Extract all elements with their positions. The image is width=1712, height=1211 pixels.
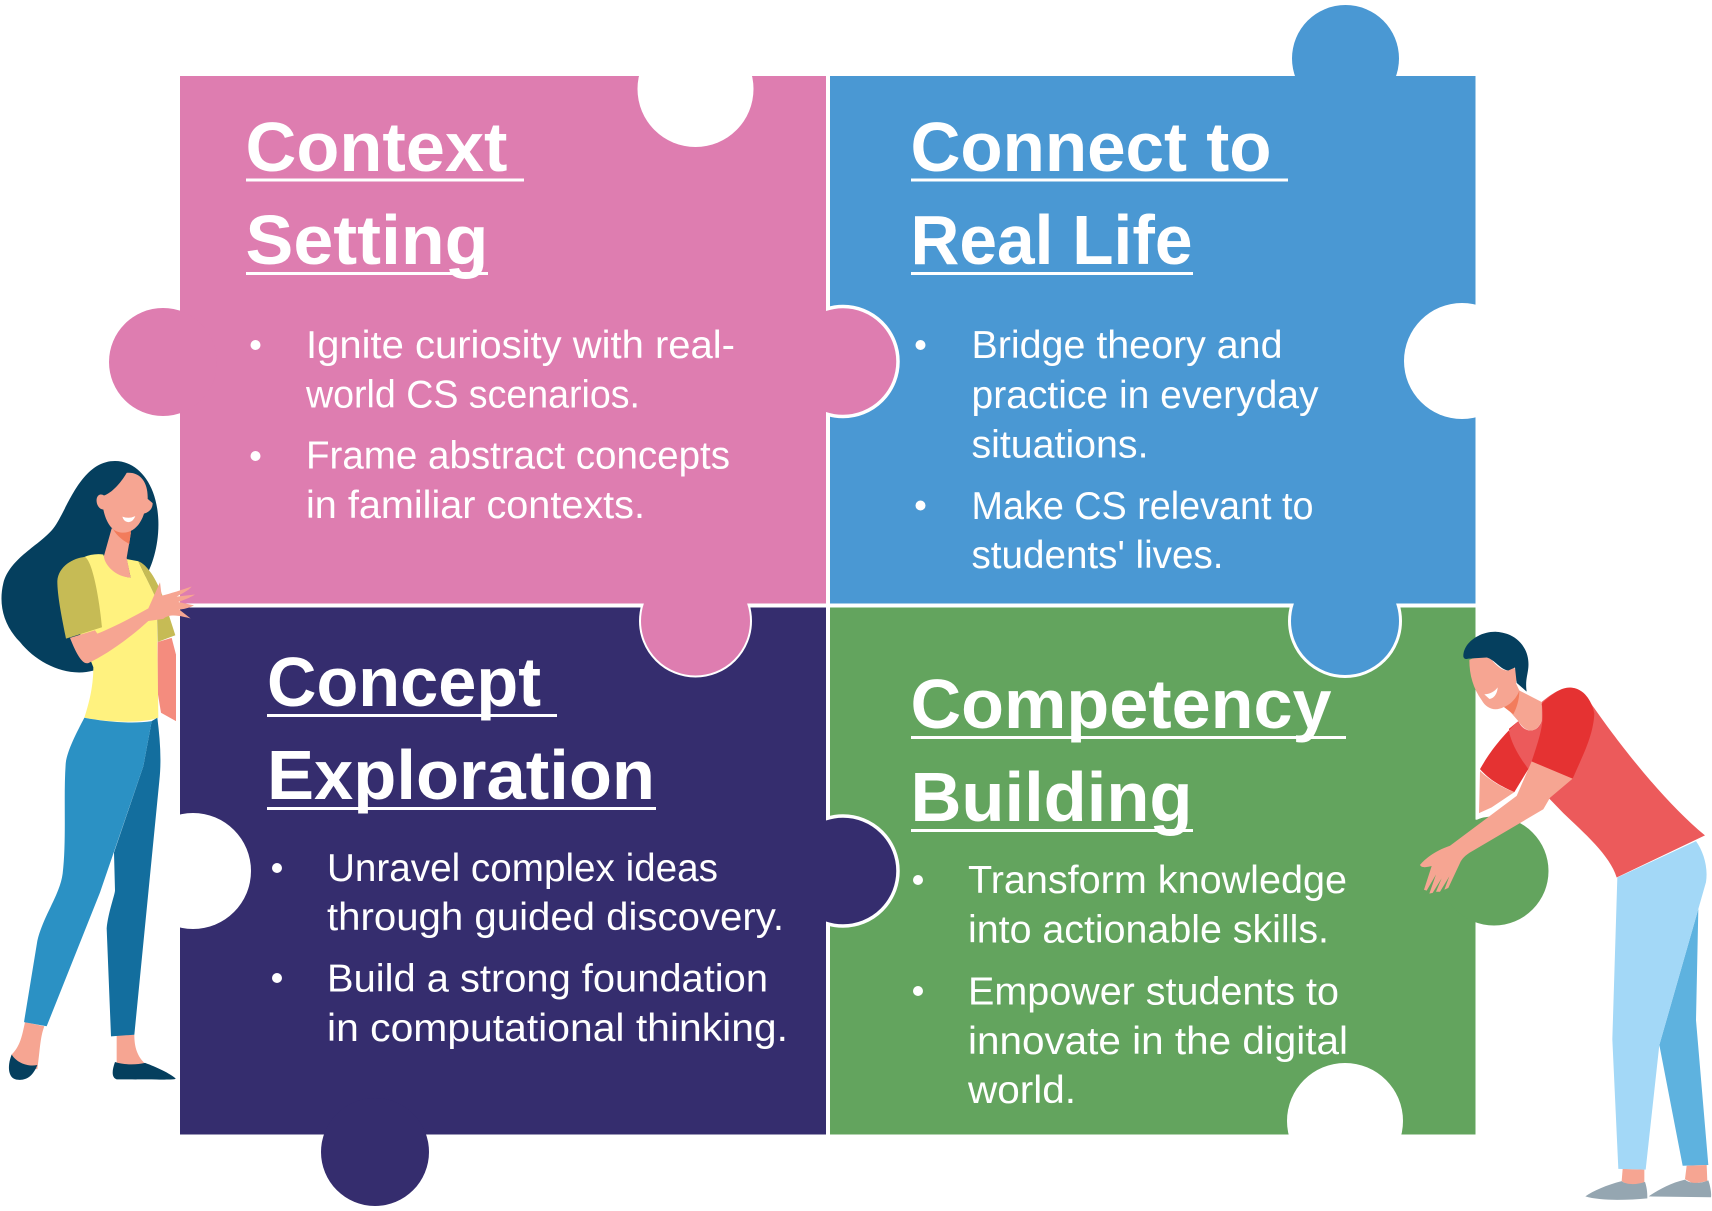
text: context setting bullets: in familiar contexts. (306, 484, 645, 527)
text: concept exploration bullets: Unravel complex ideas (327, 847, 718, 890)
heading: Competency Building: Building (910, 758, 1192, 836)
text: competency building bullets (913, 859, 1348, 1112)
panel: competency building (830, 608, 1548, 1179)
heading: Context Setting: Context (246, 108, 508, 186)
heading: Concept Exploration: Concept (267, 643, 541, 721)
panel: connect to real life (830, 5, 1520, 604)
heading: Connect to Real Life: Connect to (910, 108, 1272, 186)
illustration: man pushing puzzle (1420, 632, 1711, 1200)
heading: Competency Building: Competency (910, 665, 1332, 743)
heading: Concept Exploration (267, 643, 656, 814)
puzzle tab: pink into blue (826, 304, 900, 418)
text: concept exploration bullets: Build a strong foundation (327, 958, 768, 1000)
text: context setting bullets (250, 324, 735, 527)
heading: Concept Exploration: Exploration (267, 736, 655, 814)
text: competency building bullets: world. (967, 1069, 1076, 1112)
text: competency building bullets: Transform knowledge (968, 859, 1347, 902)
text: competency building bullets: innovate in the digital (968, 1020, 1348, 1063)
text: concept exploration bullets: in computational thinking. (327, 1007, 788, 1050)
text: connect to real life bullets: Bridge theory and (972, 324, 1282, 367)
puzzle tab: pink into navy (639, 604, 752, 678)
text: context setting bullets: Frame abstract concepts (306, 434, 730, 478)
text: concept exploration bullets: through guided discovery. (327, 896, 784, 939)
heading: Connect to Real Life (910, 108, 1288, 279)
heading: Context Setting: Setting (246, 201, 488, 279)
panel: concept exploration (135, 608, 826, 1206)
text: context setting bullets: world CS scenarios. (305, 374, 640, 416)
text: connect to real life bullets (916, 324, 1319, 577)
text: concept exploration bullets (272, 847, 788, 1050)
puzzle tab: navy into green (826, 814, 900, 928)
text: connect to real life bullets: situations. (972, 424, 1148, 466)
text: connect to real life bullets: practice in everyday (972, 374, 1319, 417)
text: connect to real life bullets: students' lives. (972, 534, 1224, 577)
text: connect to real life bullets: Make CS relevant to (972, 485, 1314, 528)
heading: Connect to Real Life: Real Life (910, 201, 1192, 279)
illustration: woman holding puzzle (1, 461, 195, 1080)
text: context setting bullets: Ignite curiosity with real- (306, 324, 735, 367)
heading: Competency Building (910, 665, 1346, 836)
puzzle tab: blue into green (1288, 604, 1402, 678)
text: competency building bullets: Empower students to (968, 970, 1339, 1014)
panel: context setting (109, 31, 826, 604)
text: competency building bullets: into actionable skills. (968, 908, 1329, 952)
heading: Context Setting (246, 108, 524, 279)
